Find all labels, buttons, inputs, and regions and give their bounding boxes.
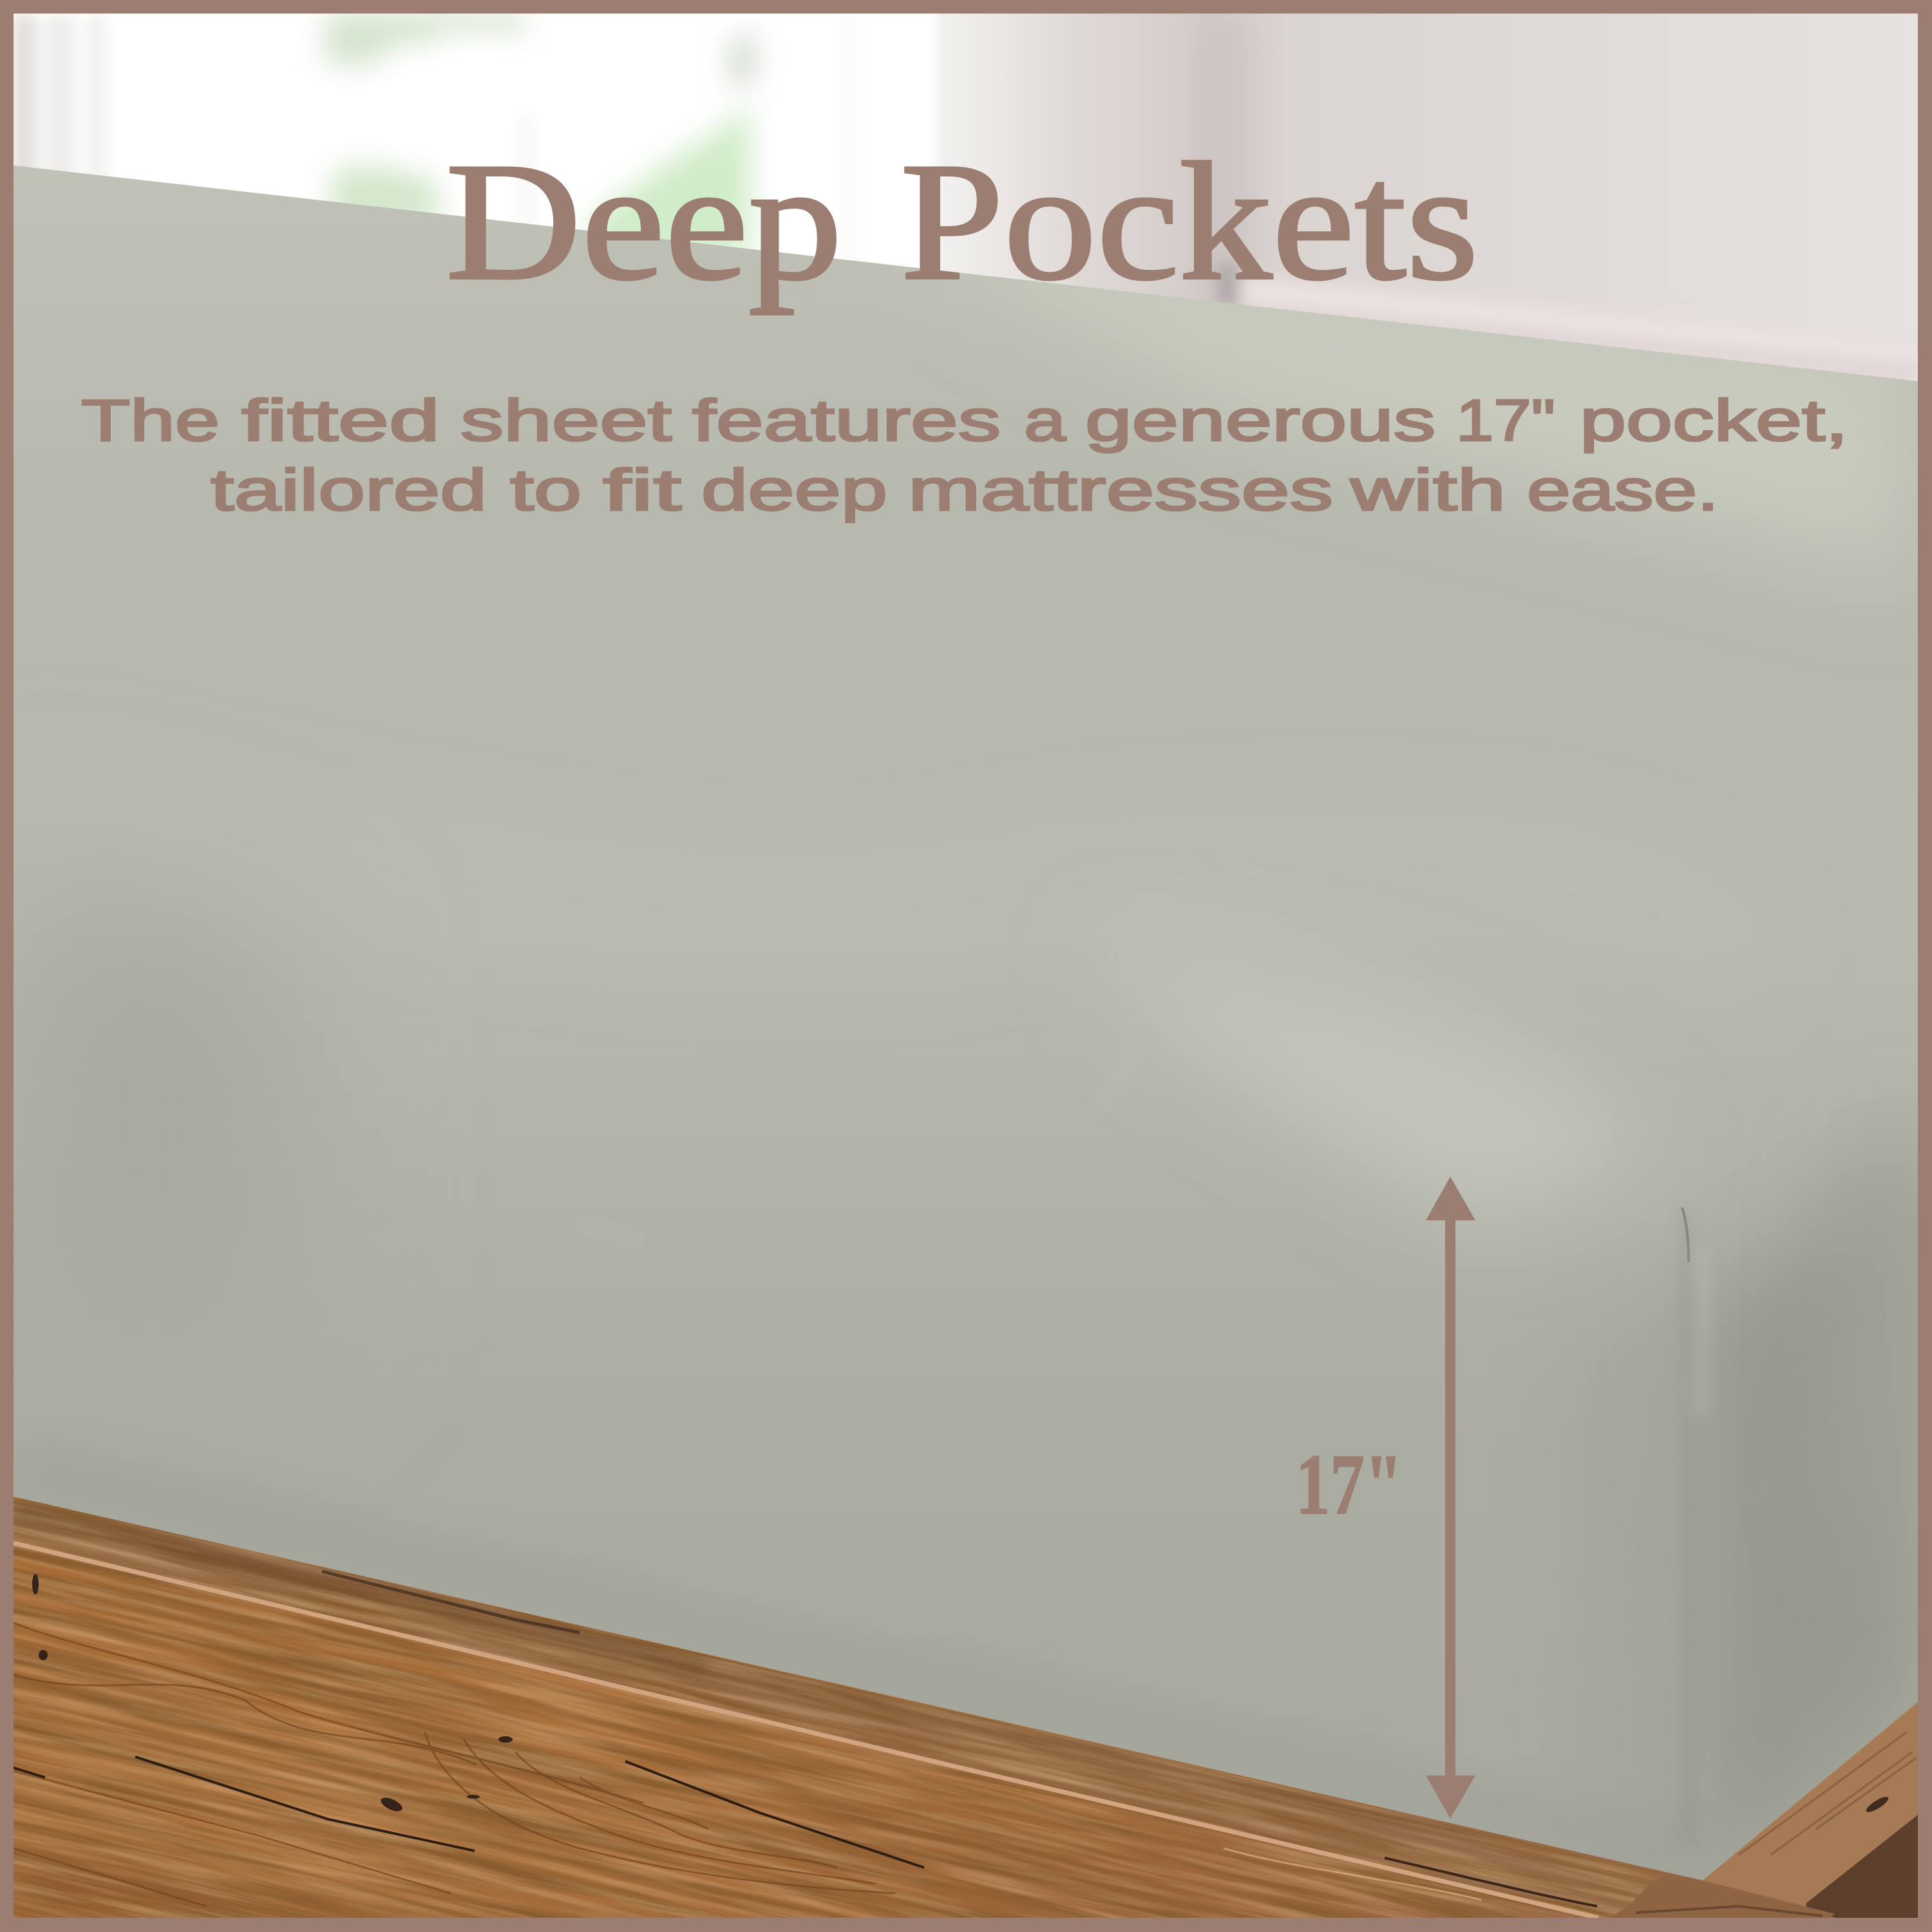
description text: deep <box>701 458 887 523</box>
description text: pocket, <box>1580 388 1848 453</box>
description text: generous <box>1085 388 1435 453</box>
corner sheet-tucked wood tab <box>1610 1873 1835 1918</box>
wood grain rings <box>14 1623 895 1906</box>
height label 17 inches: 17" <box>1296 1437 1403 1532</box>
title: Deep <box>446 128 842 315</box>
description text: with <box>1350 458 1506 523</box>
description text: fit <box>603 458 681 523</box>
double-headed height arrow <box>1426 1177 1475 1819</box>
description text: 17" <box>1456 388 1555 453</box>
right part crack <box>1385 1858 1597 1906</box>
description text: fitted <box>242 388 440 453</box>
right side rail <box>1703 1702 1918 1918</box>
description text: to <box>510 458 582 523</box>
description text: features <box>692 388 1001 453</box>
wall and window backdrop <box>14 14 1918 381</box>
title <box>446 128 1479 315</box>
title: Pockets <box>900 128 1479 315</box>
description text: The <box>81 388 220 453</box>
description text: tailored <box>211 458 487 523</box>
dark rail recess <box>1806 1815 1918 1918</box>
wood cracks and knots <box>14 1757 924 1868</box>
colour mottling <box>14 1649 580 1918</box>
wooden bed frame <box>14 1497 1918 1918</box>
top moulding strip <box>14 1497 1703 1918</box>
description text: ease. <box>1527 458 1719 523</box>
description text <box>81 388 1848 523</box>
moulding highlight <box>14 1543 1598 1918</box>
description text: sheet <box>460 388 672 453</box>
description text: mattresses <box>908 458 1333 523</box>
wood grain texture <box>14 1497 1835 1918</box>
description text: a <box>1024 388 1066 453</box>
front rail face <box>14 1497 1835 1918</box>
